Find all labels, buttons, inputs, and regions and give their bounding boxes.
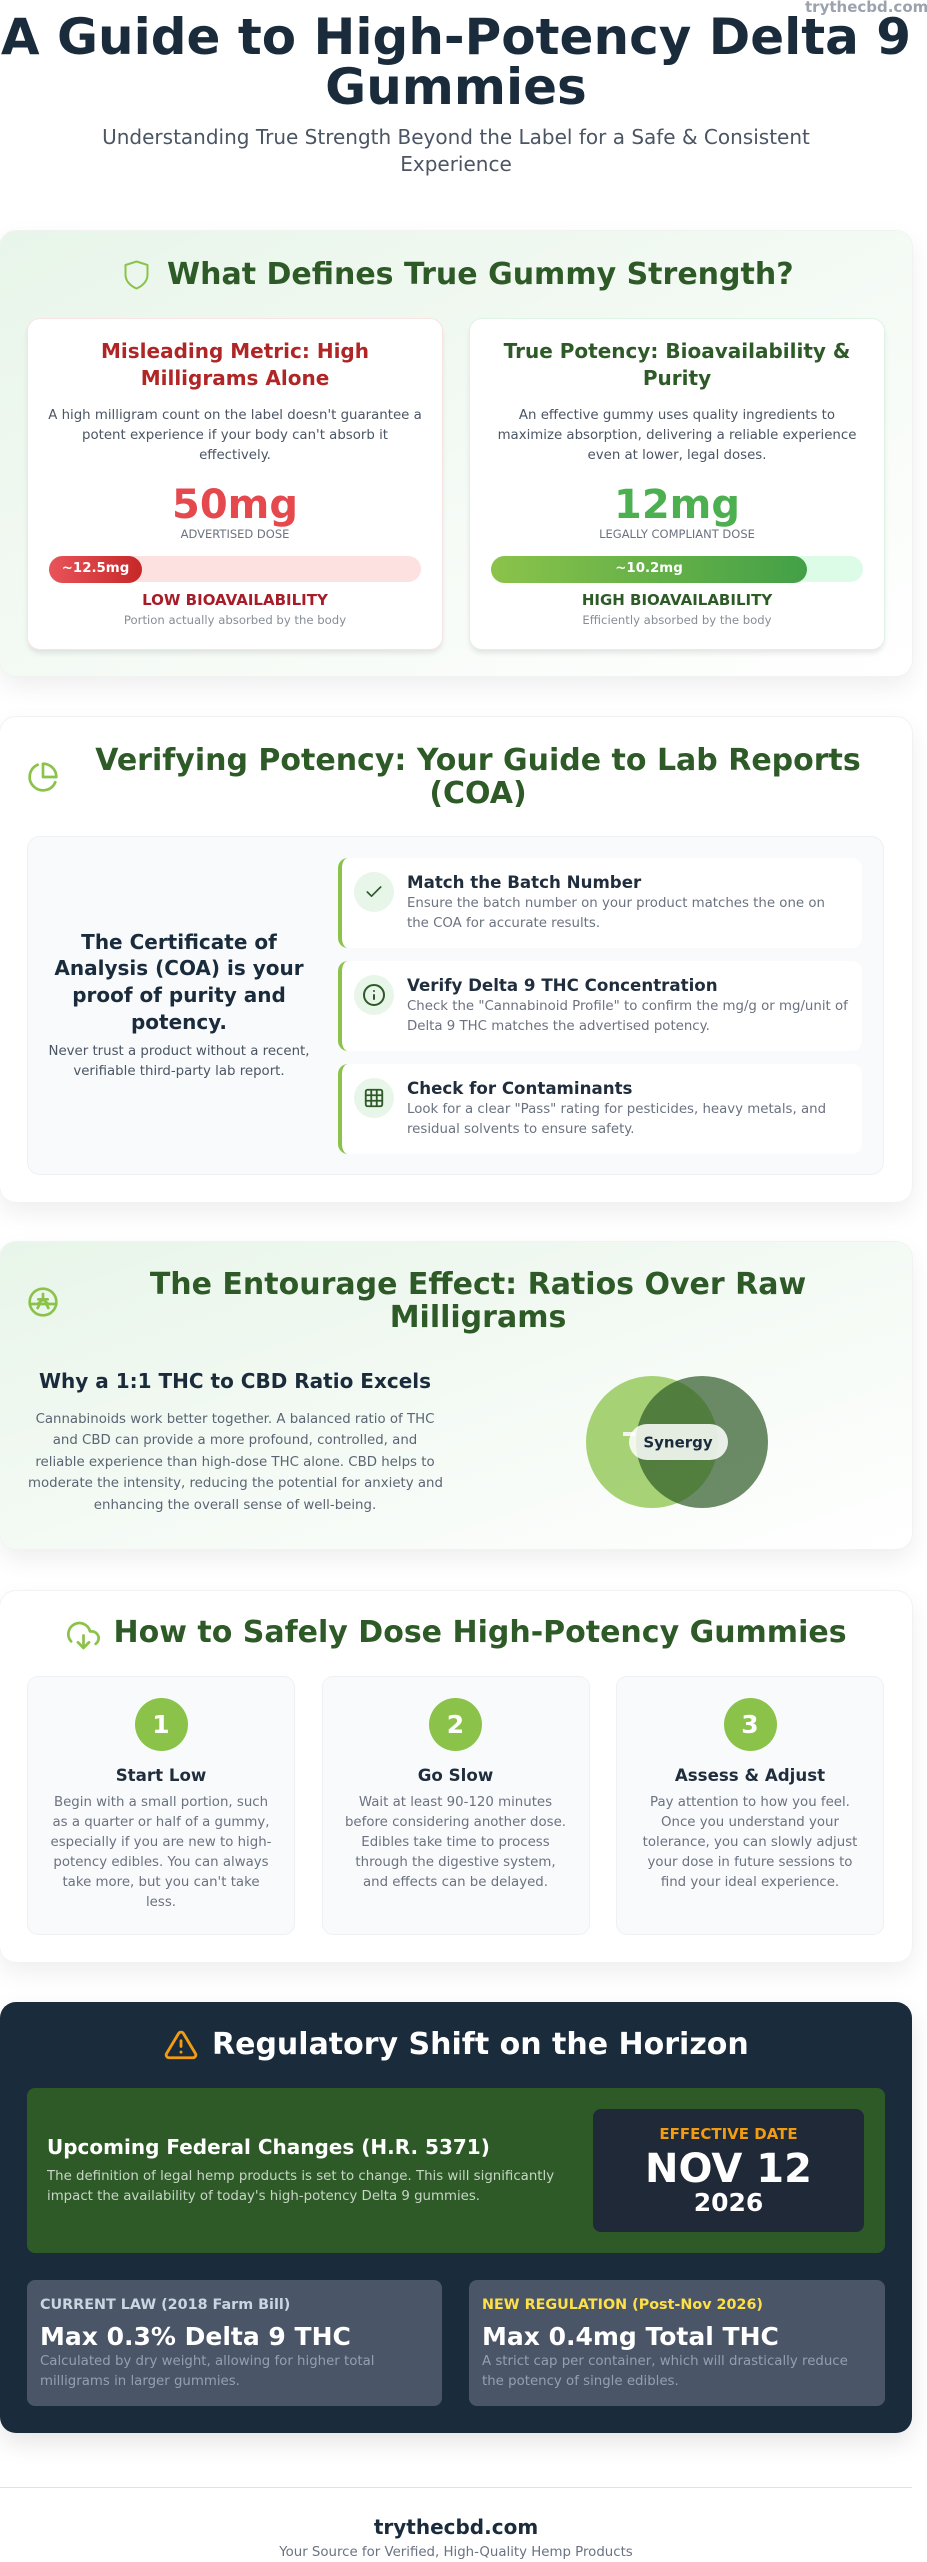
card description: maximize absorption, delivering a reliable experience bbox=[498, 428, 856, 442]
step text: potency edibles. You can always bbox=[53, 1855, 269, 1870]
card title bbox=[101, 339, 369, 390]
subheading: ratio: Why a 1:1 THC to CBD Ratio Excels bbox=[39, 1369, 431, 1393]
step text bbox=[407, 1102, 826, 1137]
step text: Edibles take time to process bbox=[361, 1835, 550, 1850]
heading: entourage: The Entourage Effect: Ratios Over Raw bbox=[150, 1267, 806, 1302]
step text: through the digestive system, bbox=[355, 1855, 556, 1870]
title: A Guide to High-Potency Delta 9 bbox=[1, 8, 911, 66]
step text: and effects can be delayed. bbox=[363, 1875, 548, 1890]
number 2: 2 bbox=[447, 1710, 464, 1739]
step text: Delta 9 THC matches the advertised potency. bbox=[407, 1019, 710, 1034]
bar fill: ~12.5mg bbox=[62, 561, 129, 576]
card title: True Potency: Bioavailability & bbox=[504, 339, 850, 363]
card description: even at lower, legal doses. bbox=[588, 448, 766, 462]
COA statement: proof of purity and bbox=[72, 983, 286, 1007]
subtitle bbox=[102, 125, 810, 176]
step title: Verify Delta 9 THC Concentration bbox=[407, 976, 718, 995]
step text: Look for a clear "Pass" rating for pesticides, heavy metals, and bbox=[407, 1102, 826, 1117]
card description bbox=[498, 408, 856, 462]
stat label: LEGALLY COMPLIANT DOSE bbox=[599, 527, 755, 541]
banner text bbox=[46, 2169, 554, 2204]
heading: entourage: Milligrams bbox=[390, 1300, 566, 1335]
number 3 bbox=[724, 1698, 776, 1751]
number 2 bbox=[429, 1698, 482, 1751]
bar caption: Portion actually absorbed by the body bbox=[124, 613, 346, 627]
bar caption: Efficiently absorbed by the body bbox=[582, 613, 772, 627]
COA note: Never trust a product without a recent, bbox=[48, 1044, 310, 1059]
date label: EFFECTIVE DATE bbox=[659, 2125, 798, 2143]
step text bbox=[643, 1795, 858, 1890]
icon: shield bbox=[124, 260, 148, 290]
heading: verifying potency: Verifying Potency: Your Guide to Lab Reports bbox=[95, 743, 861, 778]
step text: your dose in future sessions to bbox=[648, 1855, 852, 1870]
panel: lab reports bbox=[0, 717, 912, 1202]
step card: start low bbox=[28, 1677, 294, 1934]
number 1: 1 bbox=[152, 1710, 170, 1739]
step text: take more, but you can't take bbox=[62, 1875, 260, 1890]
ratio paragraph: moderate the intensity, reducing the potential for anxiety and bbox=[28, 1476, 443, 1491]
step card: assess bbox=[617, 1677, 883, 1934]
card description: potent experience if your body can't absorb it bbox=[82, 428, 388, 442]
step title: Check for Contaminants bbox=[407, 1079, 632, 1098]
bar fill: ~10.2mg bbox=[615, 561, 683, 576]
regulation note: A strict cap per container, which will drastically reduce bbox=[482, 2354, 848, 2369]
step text bbox=[51, 1795, 271, 1910]
regulation note: the potency of single edibles. bbox=[482, 2374, 679, 2389]
icon: leaf circle bbox=[28, 1287, 58, 1317]
high bioavailability label: HIGH BIOAVAILABILITY bbox=[582, 591, 772, 609]
law note bbox=[40, 2354, 374, 2389]
step text: before considering another dose. bbox=[345, 1815, 566, 1830]
regulation note bbox=[482, 2354, 848, 2389]
venn diagram bbox=[586, 1376, 768, 1508]
step text: especially if you are new to high- bbox=[51, 1835, 271, 1850]
panel: true gummy strength bbox=[0, 231, 912, 676]
COA statement bbox=[54, 930, 304, 1034]
step: contaminants bbox=[338, 1064, 862, 1154]
COA panel bbox=[28, 837, 883, 1174]
stat label: ADVERTISED DOSE bbox=[181, 527, 289, 541]
date: NOV 12 bbox=[645, 2146, 812, 2192]
heading: entourage bbox=[150, 1267, 806, 1335]
step card: go slow bbox=[322, 1677, 588, 1934]
step text bbox=[345, 1795, 566, 1890]
step: batch number bbox=[338, 858, 862, 948]
step text: Check the "Cannabinoid Profile" to confirm the mg/g or mg/unit of bbox=[407, 999, 848, 1014]
title: Gummies bbox=[325, 58, 587, 116]
bar fill bbox=[49, 556, 142, 583]
year: 2026 bbox=[694, 2188, 763, 2217]
law label: CURRENT LAW (2018 Farm Bill) bbox=[40, 2297, 290, 2313]
footer tagline: Your Source for Verified, High-Quality Hemp Products bbox=[279, 2545, 633, 2560]
COA note: verifiable third-party lab report. bbox=[73, 1064, 285, 1079]
card description: A high milligram count on the label doesn't guarantee a bbox=[48, 408, 422, 422]
step text: as a quarter or half of a gummy, bbox=[52, 1815, 270, 1830]
banner heading: Upcoming Federal Changes (H.R. 5371) bbox=[47, 2135, 490, 2159]
number 3: 3 bbox=[741, 1710, 759, 1739]
bar fill bbox=[491, 556, 807, 583]
COA note bbox=[48, 1044, 310, 1079]
step text: residual solvents to ensure safety. bbox=[407, 1122, 635, 1137]
number 1 bbox=[134, 1698, 188, 1751]
footer bbox=[0, 2486, 912, 2560]
federal changes banner bbox=[27, 2088, 885, 2253]
step title: Start Low bbox=[116, 1766, 206, 1785]
step text: tolerance, you can slowly adjust bbox=[643, 1835, 857, 1850]
step title: Match the Batch Number bbox=[407, 873, 641, 892]
COA statement: Analysis (COA) is your bbox=[54, 956, 304, 980]
card description: An effective gummy uses quality ingredients to bbox=[519, 408, 835, 422]
ratio paragraph: reliable experience than high-dose THC alone. CBD helps to bbox=[35, 1455, 435, 1470]
card title: Misleading Metric: High bbox=[101, 339, 369, 363]
card: true potency bbox=[470, 319, 884, 649]
venn diagram: Synergy bbox=[643, 1434, 713, 1452]
comparison: current law bbox=[27, 2280, 442, 2406]
low bioavailability label: LOW BIOAVAILABILITY bbox=[142, 591, 328, 609]
ratio paragraph: Cannabinoids work better together. A balanced ratio of THC bbox=[36, 1412, 434, 1427]
stat: 12mg: 12mg bbox=[614, 482, 740, 528]
step text: find your ideal experience. bbox=[661, 1875, 839, 1890]
step title: Go Slow bbox=[418, 1766, 493, 1785]
date box bbox=[593, 2109, 864, 2232]
step text: less. bbox=[146, 1895, 176, 1910]
step: THC concentration bbox=[338, 961, 862, 1051]
banner text: impact the availability of today's high-potency Delta 9 gummies. bbox=[47, 2189, 480, 2204]
regulation limit: Max 0.4mg Total THC bbox=[482, 2322, 779, 2351]
step text: Ensure the batch number on your product matches the one on bbox=[407, 896, 825, 911]
card title bbox=[504, 339, 850, 390]
step text: Pay attention to how you feel. bbox=[650, 1795, 850, 1810]
panel: entourage effect bbox=[0, 1242, 912, 1549]
subtitle: Understanding True Strength Beyond the Label for a Safe & Consistent bbox=[102, 125, 810, 149]
icon: download cloud bbox=[67, 1622, 100, 1650]
card title: Purity bbox=[643, 366, 711, 390]
law limit: Max 0.3% Delta 9 THC bbox=[40, 2322, 351, 2351]
bar: low absorption bbox=[49, 556, 421, 582]
step text: Once you understand your bbox=[661, 1815, 839, 1830]
card title: Milligrams Alone bbox=[141, 366, 329, 390]
icon: info bbox=[354, 975, 394, 1015]
icon: grid bbox=[354, 1078, 394, 1118]
icon: warning bbox=[164, 2030, 198, 2060]
COA statement: potency. bbox=[131, 1010, 227, 1034]
step text bbox=[407, 896, 825, 931]
step text: the COA for accurate results. bbox=[407, 916, 600, 931]
heading: regulatory: Regulatory Shift on the Horizon bbox=[212, 2027, 749, 2062]
title bbox=[1, 8, 911, 116]
heading: strength: What Defines True Gummy Strength? bbox=[167, 257, 794, 292]
panel: regulatory shift bbox=[0, 2002, 912, 2433]
icon: pie chart bbox=[28, 762, 58, 792]
subtitle: Experience bbox=[400, 152, 512, 176]
law note: Calculated by dry weight, allowing for higher total bbox=[40, 2354, 374, 2369]
comparison: new regulation bbox=[469, 2280, 885, 2406]
law note: milligrams in larger gummies. bbox=[40, 2374, 240, 2389]
ratio paragraph: and CBD can provide a more profound, controlled, and bbox=[53, 1433, 417, 1448]
ratio paragraph: enhancing the overall sense of well-being. bbox=[94, 1498, 376, 1513]
stat: 50mg: 50mg bbox=[172, 482, 298, 528]
step text: Begin with a small portion, such bbox=[54, 1795, 268, 1810]
card: misleading metric bbox=[28, 319, 442, 649]
step text: Wait at least 90-120 minutes bbox=[359, 1795, 552, 1810]
heading: verifying potency bbox=[95, 743, 861, 811]
card description bbox=[48, 408, 422, 462]
ratio paragraph bbox=[28, 1412, 443, 1513]
heading: verifying potency: (COA) bbox=[429, 776, 527, 811]
panel: safe dosing bbox=[0, 1591, 912, 1962]
heading: dosing: How to Safely Dose High-Potency Gummies bbox=[114, 1615, 847, 1650]
card description: effectively. bbox=[199, 448, 271, 462]
step text bbox=[407, 999, 848, 1034]
icon: check bbox=[354, 872, 394, 912]
footer brand: trythecbd.com bbox=[374, 2515, 538, 2539]
COA statement: The Certificate of bbox=[81, 930, 277, 954]
regulation label: NEW REGULATION (Post-Nov 2026) bbox=[482, 2297, 763, 2313]
step title: Assess & Adjust bbox=[675, 1766, 825, 1785]
banner text: The definition of legal hemp products is set to change. This will significantly bbox=[47, 2169, 554, 2184]
bar: high absorption bbox=[491, 556, 863, 582]
